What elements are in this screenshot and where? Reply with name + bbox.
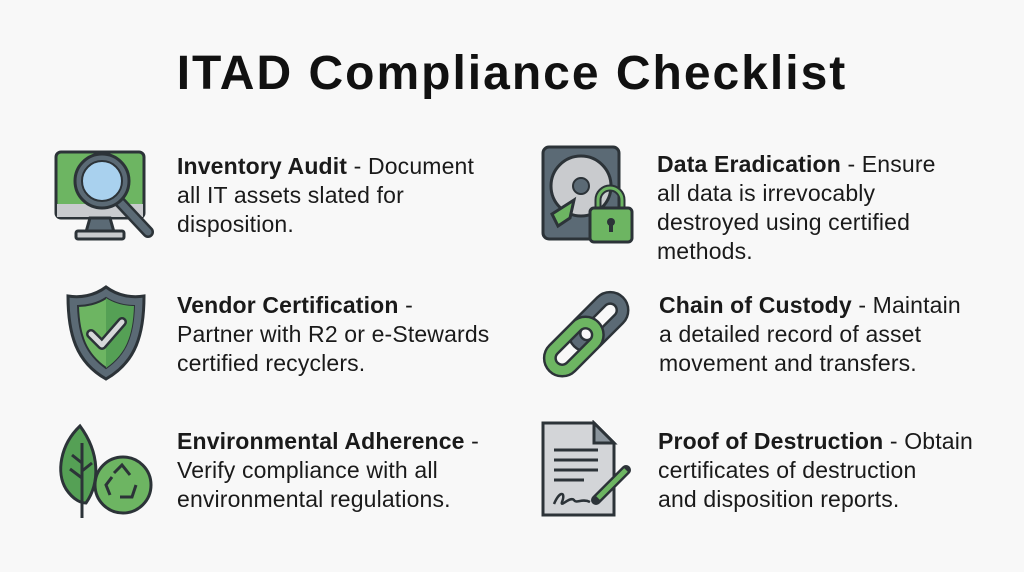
text: proof of destruction bbox=[658, 428, 973, 512]
text: vendor certification bbox=[177, 292, 489, 376]
text: chain of custody: movement and transfers. bbox=[659, 350, 917, 376]
text: data eradication: methods. bbox=[657, 238, 753, 264]
text: proof of destruction: certificates of destruction bbox=[658, 457, 916, 483]
icon: hard drive with lock bbox=[542, 146, 634, 244]
text: environmental adherence bbox=[177, 428, 479, 512]
text: chain of custody: a detailed record of asset bbox=[659, 321, 921, 347]
text: data eradication: destroyed using certified bbox=[657, 209, 910, 235]
text: vendor certification: Partner with R2 or e-Stewards bbox=[177, 321, 489, 347]
text: vendor certification: Vendor Certification - bbox=[177, 292, 413, 318]
text: environmental adherence: Environmental Adherence - bbox=[177, 428, 479, 454]
text: environmental adherence: Verify compliance with all bbox=[177, 457, 438, 483]
text: vendor certification: certified recyclers. bbox=[177, 350, 365, 376]
text: inventory audit: Inventory Audit - Document bbox=[177, 153, 474, 179]
icon: leaf with recycle bbox=[59, 424, 152, 518]
text: proof of destruction: Proof of Destruction - Obtain bbox=[658, 428, 973, 454]
icon: signed document bbox=[542, 420, 631, 516]
title: ITAD Compliance Checklist bbox=[177, 47, 847, 100]
text: data eradication: all data is irrevocably bbox=[657, 180, 875, 206]
text: chain of custody: Chain of Custody - Maintain bbox=[659, 292, 961, 318]
text: inventory audit bbox=[177, 153, 474, 237]
text: inventory audit: disposition. bbox=[177, 211, 294, 237]
icon: monitor with magnifier bbox=[54, 150, 154, 240]
text: chain of custody bbox=[659, 292, 961, 376]
text: inventory audit: all IT assets slated for bbox=[177, 182, 404, 208]
text: proof of destruction: and disposition reports. bbox=[658, 486, 899, 512]
text: data eradication: Data Eradication - Ensure bbox=[657, 151, 936, 177]
icon: chain links bbox=[542, 290, 630, 378]
text: data eradication bbox=[657, 151, 936, 264]
icon: shield with check bbox=[66, 285, 146, 381]
text: environmental adherence: environmental regulations. bbox=[177, 486, 451, 512]
